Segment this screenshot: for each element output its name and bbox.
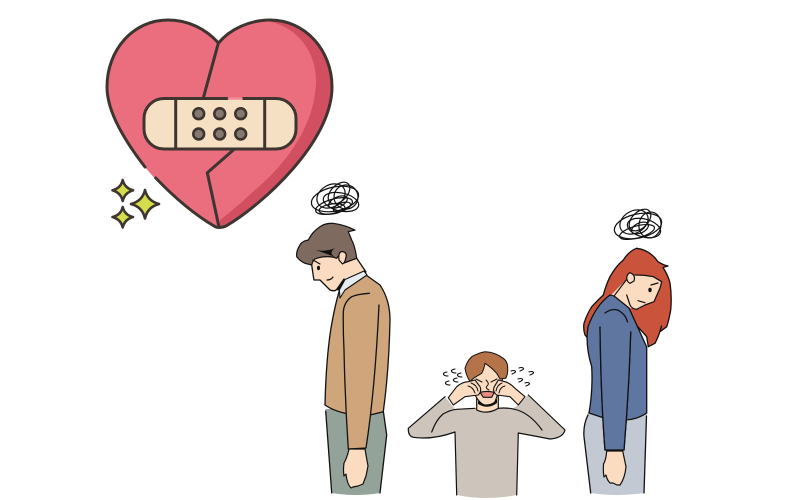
man jaw line bbox=[312, 258, 366, 291]
man arm bbox=[343, 293, 379, 449]
scribble above woman bbox=[612, 205, 664, 243]
man ear bbox=[339, 252, 346, 264]
man sweater bbox=[325, 275, 390, 415]
boy sweater bbox=[408, 395, 565, 498]
boy mouth bbox=[480, 391, 494, 397]
boy sweater outlines bbox=[408, 395, 565, 495]
crack lower bbox=[207, 150, 233, 227]
woman face bbox=[627, 275, 662, 309]
heart outline bbox=[107, 20, 332, 228]
boy hair bbox=[465, 352, 508, 382]
figure: crying boy bbox=[408, 352, 565, 498]
woman hand bbox=[603, 451, 626, 485]
woman arm bbox=[600, 310, 631, 450]
woman arm fill bbox=[600, 328, 630, 450]
boy finger lines bbox=[468, 383, 505, 393]
boy neck shadow bbox=[478, 399, 497, 407]
woman top bbox=[587, 295, 647, 420]
man collar bbox=[339, 271, 367, 298]
tears bbox=[443, 368, 534, 386]
crack upper bbox=[203, 43, 218, 98]
woman neck line bbox=[614, 279, 627, 296]
figure: man looking down bbox=[297, 178, 390, 495]
bandage bbox=[144, 98, 296, 149]
woman neck bbox=[611, 279, 640, 309]
man neck and face bbox=[312, 250, 366, 290]
man hair bbox=[297, 223, 357, 265]
woman skirt outline bbox=[584, 415, 646, 493]
figure: woman looking down bbox=[584, 205, 671, 495]
man hair strand bbox=[315, 248, 335, 257]
woman skirt bbox=[584, 412, 647, 495]
woman hair bbox=[584, 248, 671, 347]
woman ear bbox=[627, 273, 634, 283]
man jaw shadow bbox=[337, 278, 345, 291]
boy neck bbox=[477, 394, 498, 412]
heart fill bbox=[107, 20, 332, 228]
man trousers bbox=[326, 408, 387, 495]
boy eyes and nose bbox=[476, 379, 497, 390]
heart shading bbox=[220, 20, 332, 227]
boy left hand bbox=[448, 380, 481, 405]
woman face outline bbox=[627, 275, 662, 309]
boy face bbox=[470, 360, 505, 405]
woman arm edges bbox=[600, 327, 631, 450]
man eye and mouth bbox=[313, 260, 333, 280]
woman eye and mouth bbox=[648, 288, 652, 292]
icon: bandaged broken heart bbox=[107, 20, 332, 228]
man hand bbox=[344, 449, 368, 488]
boy right hand bbox=[494, 380, 525, 405]
icon: sparkles bbox=[112, 180, 159, 228]
scribble above man bbox=[309, 178, 361, 218]
